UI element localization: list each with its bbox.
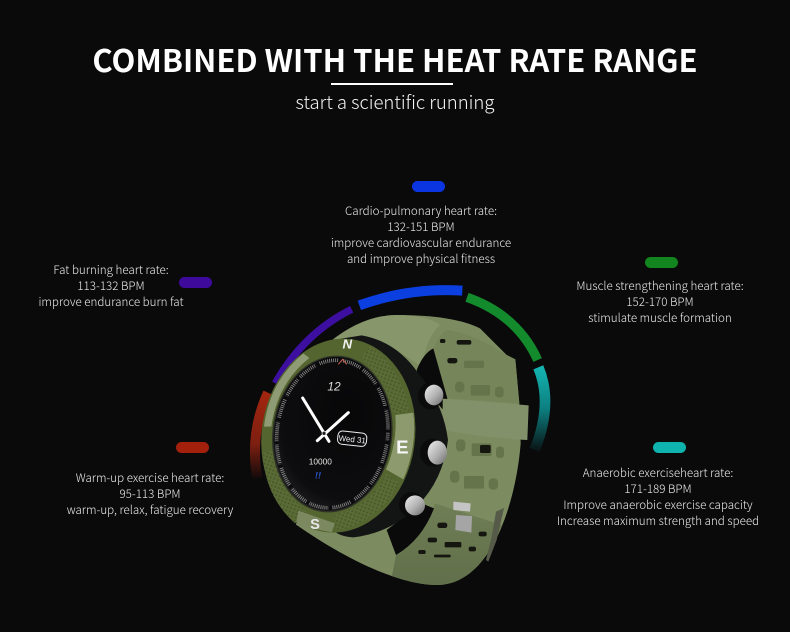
text: cardio-pulmonary heart rate: and improve physical fitness — [347, 251, 495, 267]
text: warm-up heart rate: Warm-up exercise heart rate: — [76, 470, 224, 486]
subtitle: start a scientific running — [296, 89, 494, 115]
strap back band — [433, 330, 519, 403]
text: warm-up heart rate: 95-113 BPM — [119, 486, 181, 502]
legend pill: anaerobic — [653, 442, 686, 453]
watch illustration with heart rate arcs — [250, 285, 550, 585]
text: fat burning heart rate: Fat burning heart rate: — [53, 262, 169, 278]
title: COMBINED WITH THE HEAT RATE RANGE — [92, 36, 698, 81]
text: warm-up heart rate — [67, 470, 234, 518]
text: fat burning heart rate — [38, 262, 184, 310]
text: cardio-pulmonary heart rate — [331, 203, 511, 267]
strap front band highlight — [330, 315, 440, 367]
legend pill: warm-up — [176, 442, 209, 453]
date badge: Wed 31 — [338, 434, 367, 445]
text: anaerobic heart rate: 171-189 BPM — [624, 481, 692, 497]
text: fat burning heart rate: 113-132 BPM — [77, 278, 145, 294]
text: anaerobic heart rate — [557, 465, 759, 529]
arc: muscle green — [467, 297, 538, 360]
text: cardio-pulmonary heart rate: improve cardiovascular endurance — [331, 235, 511, 251]
text: anaerobic heart rate: Improve anaerobic exercise capacity — [563, 497, 753, 513]
text: cardio-pulmonary heart rate: Cardio-pulmonary heart rate: — [345, 203, 497, 219]
hour label: 12 — [327, 380, 341, 394]
buckle — [453, 502, 471, 512]
title underline — [331, 83, 453, 85]
watch case — [330, 335, 448, 537]
strap inner opening upper — [417, 348, 447, 410]
legend pill: cardio — [412, 181, 445, 192]
clock hands — [303, 398, 348, 441]
text: anaerobic heart rate: Increase maximum strength and speed — [557, 513, 759, 529]
bezel: S — [310, 517, 320, 533]
strap holes — [450, 361, 504, 490]
strap lower band — [392, 504, 502, 585]
step icon: !! — [315, 470, 321, 480]
legend pill: fat burning — [179, 277, 212, 288]
bezel light rim — [264, 353, 309, 427]
tick ring — [268, 354, 396, 514]
legend pill: muscle — [645, 257, 678, 268]
text: muscle strengthening heart rate: 152-170 BPM — [626, 294, 694, 310]
north marker — [338, 359, 347, 364]
text: muscle strengthening heart rate — [576, 278, 744, 326]
bezel knurled segments — [361, 346, 410, 413]
bezel — [249, 329, 428, 543]
strap loop — [443, 399, 529, 440]
watch strap — [297, 315, 529, 603]
strap inner opening lower — [387, 503, 434, 555]
date badge — [337, 431, 367, 447]
step count: 10000 — [309, 457, 332, 467]
text: anaerobic heart rate: Anaerobic exerciseheart rate: — [583, 465, 733, 481]
bezel: E — [396, 436, 409, 457]
arc: warm-up red — [255, 393, 268, 478]
text: warm-up heart rate: warm-up, relax, fatigue recovery — [67, 502, 233, 518]
compass letters: N — [343, 337, 353, 352]
clock face — [264, 349, 401, 519]
text: muscle strengthening heart rate: Muscle strengthening heart rate: — [576, 278, 744, 294]
arc: fat burning purple — [275, 309, 352, 383]
bezel south segment — [296, 511, 335, 532]
side buttons — [399, 383, 447, 517]
bezel light segment east — [386, 413, 414, 479]
text: muscle strengthening heart rate: stimulate muscle formation — [588, 310, 732, 326]
text: cardio-pulmonary heart rate: 132-151 BPM — [387, 219, 455, 235]
arc: cardio blue — [359, 290, 462, 305]
text: fat burning heart rate: improve endurance burn fat — [38, 294, 184, 310]
arc: anaerobic teal — [535, 367, 545, 450]
